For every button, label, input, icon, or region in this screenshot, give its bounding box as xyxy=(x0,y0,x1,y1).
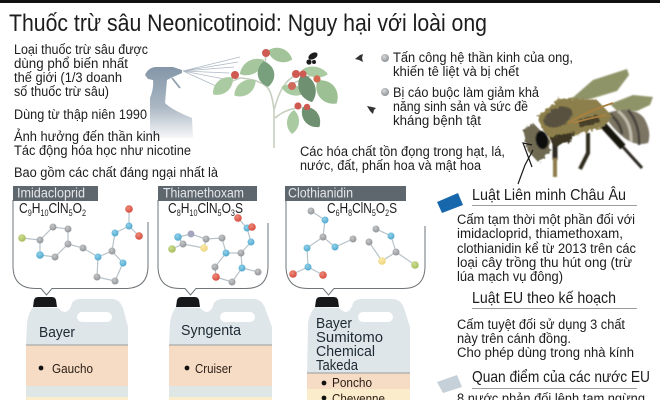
panel: Thiamethoxam: 5 xyxy=(218,208,222,218)
text block: EU law details: lúa mạch vụ đông) xyxy=(457,269,563,284)
text block: planned law details: này trên cánh đồng. xyxy=(457,331,571,346)
illustration: honey bee xyxy=(518,69,653,184)
text block: intro facts xyxy=(14,42,218,180)
panel: Clothianidin: S xyxy=(389,200,397,217)
callout outline xyxy=(158,200,268,295)
text block: intro facts: số thuốc trừ sâu) xyxy=(14,84,109,99)
panel: Imidacloprid: 10 xyxy=(40,208,48,218)
text block: residues xyxy=(300,144,505,173)
jug: Bayer: Bayer xyxy=(39,324,75,341)
panel: Thiamethoxam: 3 xyxy=(231,208,235,218)
molecule: imidacloprid xyxy=(18,205,143,284)
text block: intro facts: Bao gồm các chất đáng ngại nhất là xyxy=(14,165,218,180)
text block: EU law details xyxy=(457,212,636,284)
title: Thuốc trừ sâu Neonicotinoid: Nguy hại với loài ong xyxy=(9,10,487,37)
text block: planned law details xyxy=(457,317,634,360)
bullet list: effects on bees: khiến tê liệt và bị chết xyxy=(393,64,519,79)
panel: Clothianidin: Clothianidin xyxy=(288,184,353,200)
panel: Clothianidin: 8 xyxy=(348,208,352,218)
bullet list: effects on bees xyxy=(381,50,573,128)
icon: small insect top xyxy=(355,54,363,62)
panel: Imidacloprid: O xyxy=(73,200,82,217)
panel: Clothianidin: 2 xyxy=(385,208,389,218)
callout outline xyxy=(286,200,425,295)
icon: EU flag blue xyxy=(437,193,463,213)
illustration: plant xyxy=(209,44,344,148)
molecule: thiamethoxam xyxy=(168,214,262,286)
panel: Clothianidin: O xyxy=(376,200,385,217)
heading: EU law: Luật Liên minh Châu Âu xyxy=(472,185,626,204)
panel: Clothianidin: H xyxy=(340,200,348,217)
jug: Bayer xyxy=(26,297,128,400)
bullet list: effects on bees: năng sinh sản và sức đề xyxy=(393,99,528,114)
panel: Thiamethoxam: ClN xyxy=(197,200,218,217)
text block: EU law details: loại cây trồng thu hút ong (trừ xyxy=(457,255,632,270)
jug: Syngenta: Syngenta xyxy=(181,322,242,339)
top bar xyxy=(0,0,660,3)
text block: planned law details: Cấm tuyệt đối sử dụng 3 chất xyxy=(457,317,625,332)
text block: intro facts: Dùng từ thập niên 1990 xyxy=(14,107,147,122)
bullet list: effects on bees: Tấn công hệ thần kinh của ong, xyxy=(393,50,573,65)
panel: Thiamethoxam: 10 xyxy=(189,208,197,218)
text block: intro facts: Ảnh hưởng đến thần kinh xyxy=(14,129,160,144)
jug: Bayer Sumitomo Chemical Takeda: Bayer xyxy=(316,315,352,332)
panel: Thiamethoxam: C xyxy=(168,200,179,217)
bullet list: effects on bees: Bị cáo buộc làm giảm khả xyxy=(393,85,539,100)
panel: Clothianidin: C xyxy=(327,200,338,217)
panel: Clothianidin: 6 xyxy=(336,208,340,218)
bullet list: effects on bees: kháng bệnh tật xyxy=(393,113,481,128)
text block: EU law details: imidacloprid, thiamethoxam, xyxy=(457,226,623,241)
panel: Clothianidin xyxy=(285,184,425,295)
text block: intro facts: thế giới (1/3 doanh xyxy=(14,70,122,85)
jug: Bayer: Gaucho xyxy=(52,361,93,376)
icon: small insect lower xyxy=(367,106,376,114)
jug: Syngenta: Cruiser xyxy=(195,361,233,376)
text block: residues: nước, đất, phấn hoa và mật hoa xyxy=(300,158,481,173)
text block: intro facts: Loại thuốc trừ sâu được xyxy=(14,42,148,57)
panel: Imidacloprid: 2 xyxy=(82,208,86,218)
text block: intro facts: dùng phổ biến nhất xyxy=(14,56,128,71)
panel: Thiamethoxam: S xyxy=(235,200,243,217)
text block: intro facts: Tác động hóa học như nicotine xyxy=(14,143,191,158)
panel: Imidacloprid: H xyxy=(32,200,40,217)
jug: Bayer Sumitomo Chemical Takeda: Takeda xyxy=(316,357,359,374)
text block: EU law details: Cấm tạm thời một phần đối với xyxy=(457,212,635,227)
jug: Bayer Sumitomo Chemical Takeda: Sumitomo xyxy=(316,329,383,346)
jug: Bayer Sumitomo Chemical Takeda xyxy=(307,297,410,400)
text block: planned law details: Cho phép dùng trong nhà kính xyxy=(457,345,634,360)
text block: EU law details: clothianidin kể từ 2013 trên các xyxy=(457,241,636,256)
molecule: clothianidin xyxy=(289,208,419,279)
icon: spray bottle xyxy=(145,57,240,138)
panel: Thiamethoxam: O xyxy=(222,200,231,217)
heading: planned EU law: Luật EU theo kế hoạch xyxy=(472,290,616,307)
text block: residues: Các hóa chất tồn đọng trong hạt, lá, xyxy=(300,144,505,159)
panel: Imidacloprid: ClN xyxy=(48,200,69,217)
panel: Imidacloprid: C xyxy=(19,200,30,217)
panel: Imidacloprid: 5 xyxy=(69,208,73,218)
panel: Imidacloprid: Imidacloprid xyxy=(17,184,85,200)
panel: Imidacloprid xyxy=(13,184,148,295)
panel: Thiamethoxam: Thiamethoxam xyxy=(163,184,244,200)
panel: Thiamethoxam xyxy=(158,184,268,295)
jug: Syngenta xyxy=(169,297,272,400)
jug: Bayer Sumitomo Chemical Takeda: Poncho xyxy=(332,375,372,390)
panel: Thiamethoxam: H xyxy=(181,200,189,217)
callout outline xyxy=(13,200,148,295)
jug: Bayer Sumitomo Chemical Takeda: Chemical xyxy=(316,343,375,360)
icon: EU flag pale xyxy=(437,375,462,393)
panel: Imidacloprid: 9 xyxy=(28,208,32,218)
panel: Clothianidin: 5 xyxy=(372,208,376,218)
icon: insect on plant xyxy=(306,51,319,65)
panel: Clothianidin: ClN xyxy=(352,200,372,217)
panel: Thiamethoxam: 8 xyxy=(177,208,181,218)
